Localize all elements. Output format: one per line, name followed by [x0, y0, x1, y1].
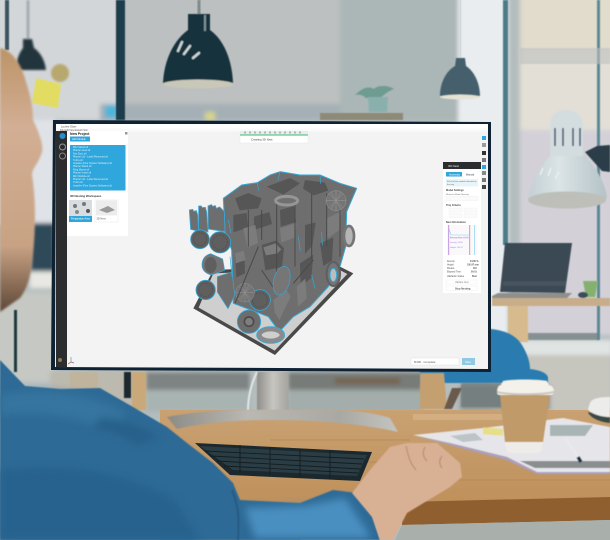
panel header: 3D Nest — [448, 164, 459, 168]
monitor — [51, 120, 491, 372]
side ring right — [344, 226, 354, 246]
top ring — [276, 196, 298, 205]
panel buttons — [446, 280, 477, 290]
desk speaker — [588, 397, 610, 423]
nest information chart: Density: 24.80 — [450, 241, 464, 244]
bottom printer selector: M100 - Complete — [414, 360, 436, 364]
sticky note — [32, 78, 61, 108]
cyan support accents — [228, 172, 322, 288]
nest statistics: 100.97 mm — [467, 264, 479, 266]
app title bar: Lychee Slicer — [61, 124, 77, 128]
right settings panel: Tray Criteria — [446, 204, 461, 207]
nest statistics: Density — [447, 260, 456, 263]
model list: Planter Insert.stl — [73, 172, 92, 175]
nest statistics: Models — [447, 268, 455, 270]
model list: Planter Stand.stl — [73, 165, 92, 168]
funnel part left — [202, 254, 225, 275]
monitor stand neck — [248, 372, 289, 410]
keyboard — [195, 443, 372, 481]
dark recesses — [233, 178, 333, 287]
model list: Planter Lid - Label Removed.stl — [73, 178, 108, 181]
workspace thumbnail: preparation: Preparation Area — [71, 218, 90, 220]
mode tabs — [446, 172, 475, 176]
right settings panel — [443, 162, 481, 293]
status toast: Creating 3D Nest — [251, 138, 273, 142]
monitor bezel — [51, 120, 491, 372]
right settings panel: Model Settings — [446, 189, 464, 192]
left castle blocks — [189, 205, 225, 232]
project panel — [67, 131, 128, 236]
bottom ring — [257, 327, 285, 343]
model list: Mini Module.stl — [73, 175, 90, 178]
app menu bar — [56, 128, 488, 132]
vertical gaps — [235, 193, 340, 303]
mode tabs: Automatic — [449, 174, 461, 176]
coffee cup — [497, 380, 554, 454]
bottom printer selector — [411, 358, 475, 365]
model list: Planter Lid - Label Removed.stl — [73, 156, 108, 159]
pendant lamp: left small — [16, 0, 69, 82]
model list: Impeller (Fine System Software).stl — [73, 162, 112, 165]
axis gizmo — [68, 357, 74, 364]
pendant lamp: centre black — [163, 0, 233, 88]
info note — [446, 179, 478, 186]
window frames — [5, 0, 610, 410]
papers on desk — [413, 418, 610, 474]
pendant lamp: right — [440, 0, 480, 100]
bottom printer selector: Slice — [465, 360, 472, 364]
sleeve seam — [232, 490, 239, 540]
nest statistics: 118 — [473, 268, 477, 270]
app menu bar: File Edit View Export Help — [60, 129, 88, 132]
mode tabs: Manual — [466, 174, 475, 176]
model list: Turbo.stl — [73, 159, 83, 162]
background desk with laptop — [492, 243, 610, 342]
nest statistics: Validation Status — [447, 275, 465, 278]
dial ridges — [194, 233, 267, 307]
knuckles — [406, 446, 442, 470]
right settings panel: Nest Information — [446, 221, 466, 224]
nest information chart — [447, 225, 477, 255]
chair legs — [420, 373, 501, 409]
monitor screen — [55, 124, 488, 369]
icon: plant on shelf — [320, 86, 403, 120]
side ring lower — [327, 262, 340, 286]
model list: Impeller (Fine System Software).stl — [73, 184, 112, 187]
nest statistics — [447, 260, 479, 278]
man in blue shirt — [0, 48, 462, 540]
project panel: 3D Nesting Workspace — [70, 194, 102, 198]
fan wheel upper — [326, 191, 346, 211]
nest statistics: Height — [447, 264, 454, 266]
left toolbar — [56, 131, 67, 367]
info note: Fill all of the models selected on — [447, 180, 477, 183]
panel buttons: Stop Nesting — [455, 288, 471, 290]
model list: Fan Duct.stl — [73, 152, 87, 155]
shirt folds — [0, 391, 371, 540]
import button: Add Models — [72, 137, 86, 141]
workspace thumbnail: 3D nest: 3D Nest — [96, 218, 106, 220]
bottom wheel — [237, 310, 261, 333]
nest statistics: Best — [472, 275, 477, 278]
head with hair — [0, 48, 42, 312]
project panel: New Project — [70, 132, 90, 136]
nest information chart: Average Flow: 24.09 — [450, 236, 469, 239]
panel buttons: Validate Nest — [455, 281, 469, 284]
model list: Mini Stand.stl — [73, 146, 88, 149]
lower left blocks — [217, 272, 235, 309]
right settings panel: Minimum Model Spacing — [446, 194, 470, 196]
nest statistics: 00:01 — [471, 272, 478, 274]
model list — [70, 145, 126, 190]
main model mass — [223, 172, 357, 332]
wooden desk — [160, 410, 610, 540]
cone part — [270, 265, 293, 297]
shirt — [0, 360, 380, 540]
nest statistics: Elapsed Time — [447, 272, 462, 274]
model list: Turbo.stl — [73, 181, 83, 184]
blue chair — [420, 329, 548, 383]
3D model on build plate — [188, 171, 358, 355]
forearm and hand — [352, 443, 462, 540]
model list: Ring Mount.stl — [73, 168, 89, 171]
app title bar — [56, 124, 488, 129]
info note: the tray — [447, 183, 455, 186]
round dials — [191, 230, 270, 310]
right vertical tools — [482, 136, 486, 189]
desk lamp — [528, 110, 610, 208]
monitor stand base — [167, 410, 398, 432]
nest statistics: 24.80 % — [470, 260, 478, 263]
status toast — [240, 134, 308, 143]
build plate — [193, 265, 353, 355]
model list: Planter Gear.stl — [73, 149, 91, 152]
fan wheel lower — [236, 283, 254, 302]
top tool strip — [240, 131, 308, 134]
nest information chart: Height: 100.97 — [450, 246, 464, 249]
lit faces — [235, 211, 342, 320]
